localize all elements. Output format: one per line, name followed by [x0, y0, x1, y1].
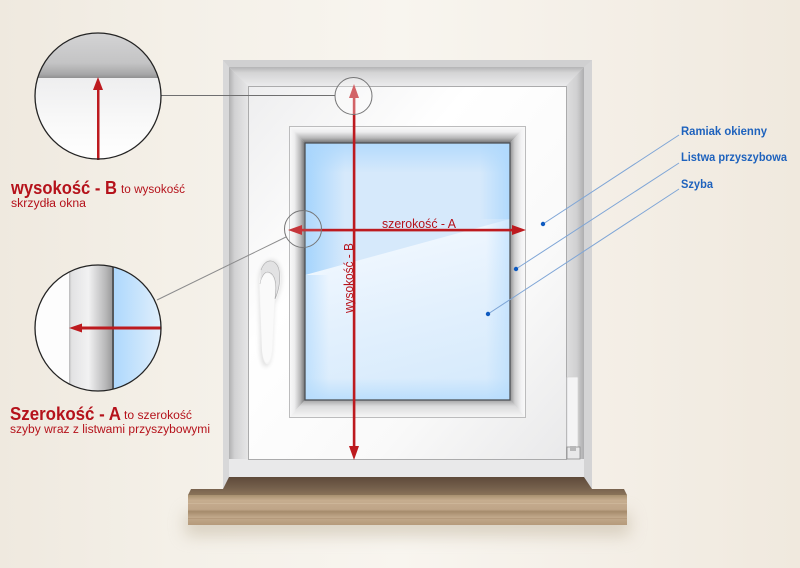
- text block: szerokość A: [10, 404, 210, 436]
- text block: wysokość B: [10, 178, 185, 210]
- callout: Listwa przyszybowa: [514, 150, 787, 271]
- label: szerokość - A: szerokość - A: [382, 217, 457, 231]
- window recess: [223, 60, 592, 489]
- window sash: [248, 86, 567, 460]
- detail circle: height: [35, 33, 161, 160]
- width arrow: szerokość A: [288, 225, 526, 235]
- text block: wysokość B: to wysokość: [121, 184, 185, 196]
- window sill: [188, 477, 627, 525]
- height arrow: wysokość B: [349, 84, 359, 460]
- connector line: top detail: [161, 94, 335, 96]
- text block: szerokość A: Szerokość - A: [10, 404, 121, 424]
- window handle: [259, 260, 281, 367]
- text block: wysokość B: skrzydła okna: [11, 198, 87, 210]
- callout: Szyba: Szyba: [681, 177, 713, 191]
- text block: wysokość B: wysokość - B: [10, 178, 117, 198]
- label: wysokość - B: wysokość - B: [342, 243, 356, 314]
- text block: szerokość A: to szerokość: [124, 410, 192, 422]
- callout: Szyba: [486, 177, 713, 316]
- callout: Ramiak okienny: Ramiak okienny: [681, 124, 767, 138]
- callout: Listwa przyszybowa: Listwa przyszybowa: [681, 150, 787, 164]
- window hinge: [567, 377, 580, 459]
- text block: szerokość A: szyby wraz z listwami przyszybowymi: [10, 424, 210, 436]
- callout: Ramiak okienny: [541, 124, 767, 226]
- connector line: width detail: [157, 237, 286, 300]
- glass pane: [305, 143, 510, 400]
- glazing bead: [289, 126, 526, 418]
- highlight circle on top of sash: [335, 78, 372, 114]
- highlight circle on bead: [284, 210, 322, 248]
- detail circle: width: [35, 265, 161, 391]
- sill shadow: [185, 512, 630, 536]
